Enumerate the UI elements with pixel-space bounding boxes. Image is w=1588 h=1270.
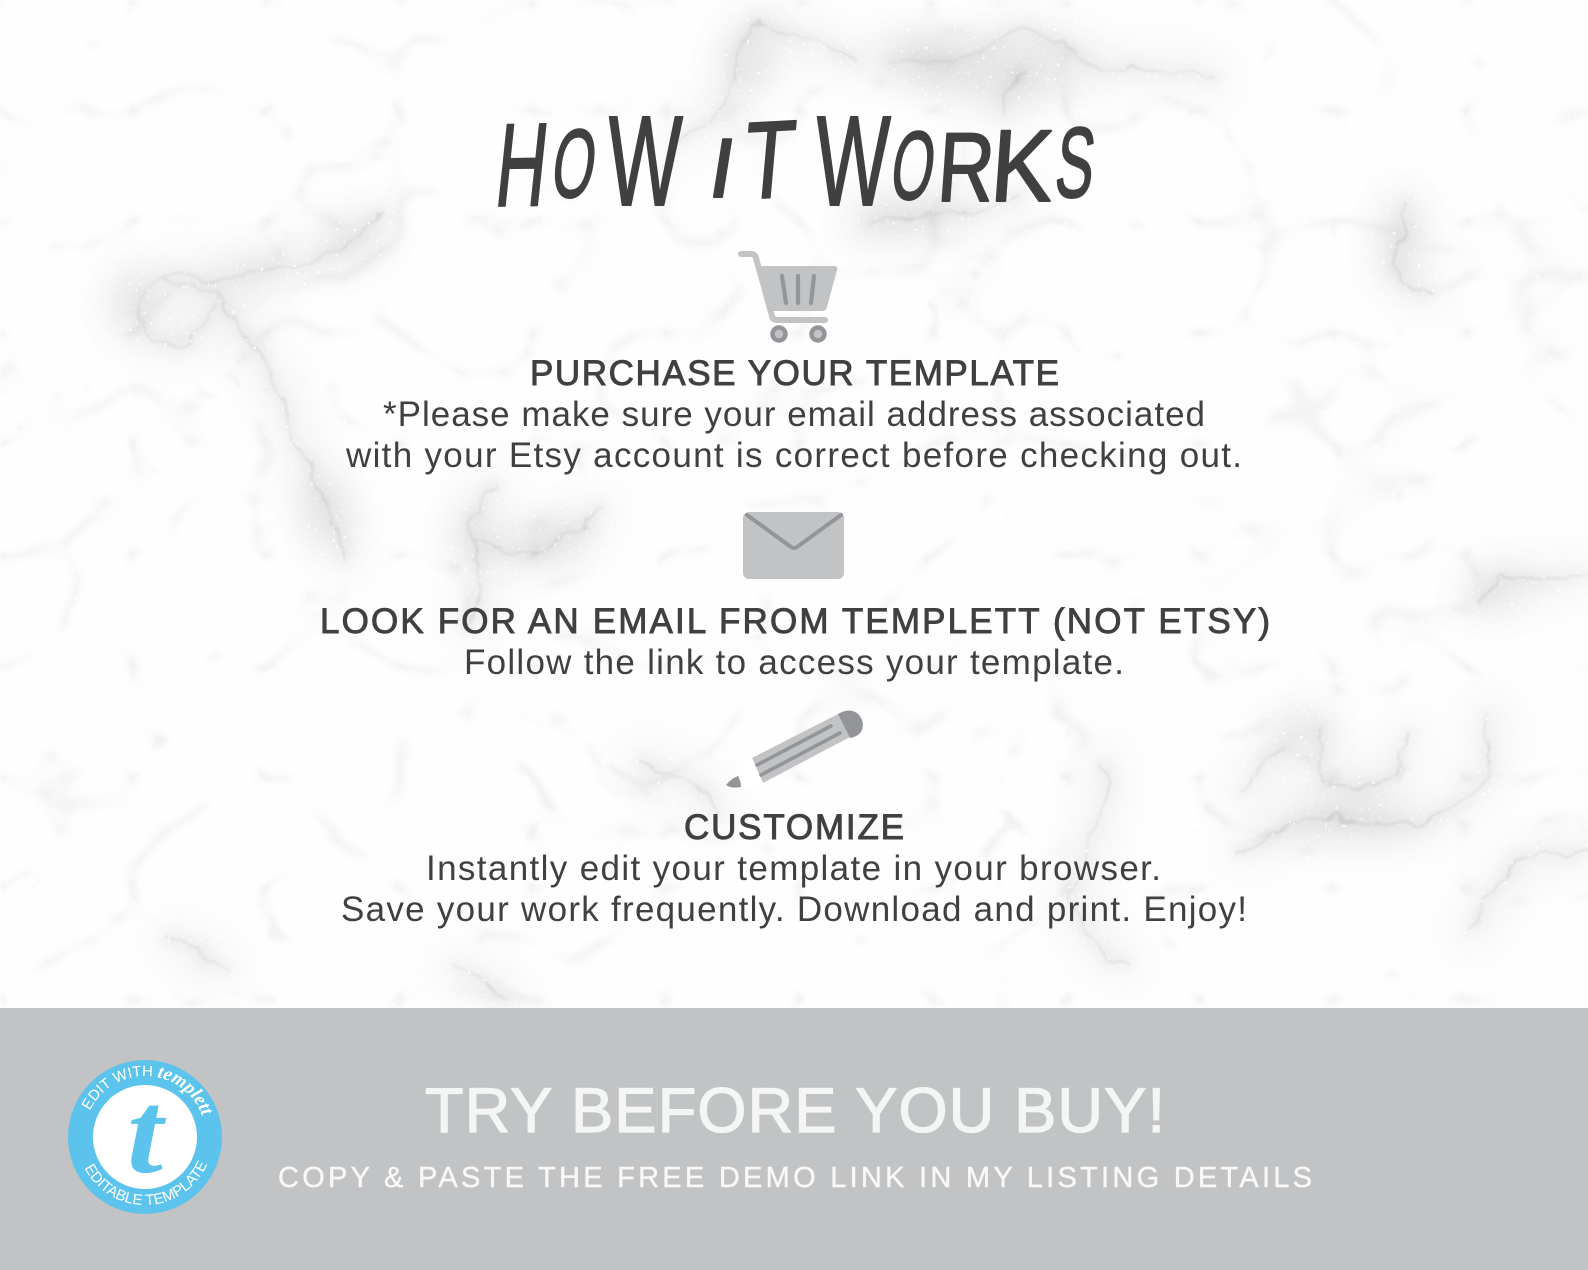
footer band bbox=[0, 1008, 1588, 1270]
step 1 text: *Please make sure your email address associated bbox=[383, 395, 1205, 434]
badge: edit with templett: t bbox=[127, 1067, 167, 1198]
title: O bbox=[885, 111, 942, 220]
badge: edit with templett: EDIT WITH templett bbox=[82, 1066, 212, 1116]
icon: shopping cart bbox=[741, 254, 837, 340]
step 1 text: PURCHASE YOUR TEMPLATE bbox=[530, 354, 1059, 393]
badge: edit with templett: EDITABLE TEMPLATE bbox=[84, 1160, 208, 1205]
title: H bbox=[490, 100, 554, 232]
icon: envelope bbox=[743, 512, 844, 579]
step 3 text bbox=[341, 808, 1247, 929]
title: T bbox=[739, 98, 800, 223]
title: K bbox=[987, 109, 1057, 223]
title: W bbox=[605, 90, 684, 233]
step 2 text: LOOK FOR AN EMAIL FROM TEMPLETT (NOT ETSY) bbox=[320, 602, 1270, 641]
step 1 text bbox=[345, 354, 1242, 475]
callout heading: TRY BEFORE YOU BUY! bbox=[425, 1076, 1165, 1146]
marble background bbox=[0, 0, 1588, 1008]
icon: pencil bbox=[726, 710, 863, 789]
title: R bbox=[935, 112, 998, 222]
title bbox=[490, 90, 1100, 233]
badge: edit with templett bbox=[68, 1060, 222, 1214]
step 2 text bbox=[320, 602, 1270, 682]
step 3 text: CUSTOMIZE bbox=[684, 808, 904, 847]
step 1 text: with your Etsy account is correct before checking out. bbox=[345, 436, 1242, 475]
title: W bbox=[813, 90, 892, 233]
title: S bbox=[1051, 107, 1100, 219]
callout subheading: COPY & PASTE THE FREE DEMO LINK IN MY LISTING DETAILS bbox=[278, 1162, 1312, 1194]
step 3 text: Save your work frequently. Download and print. Enjoy! bbox=[341, 890, 1247, 929]
title: O bbox=[546, 109, 603, 218]
step 2 text: Follow the link to access your template. bbox=[464, 643, 1124, 682]
title: I bbox=[703, 120, 742, 215]
step 3 text: Instantly edit your template in your browser. bbox=[426, 849, 1161, 888]
